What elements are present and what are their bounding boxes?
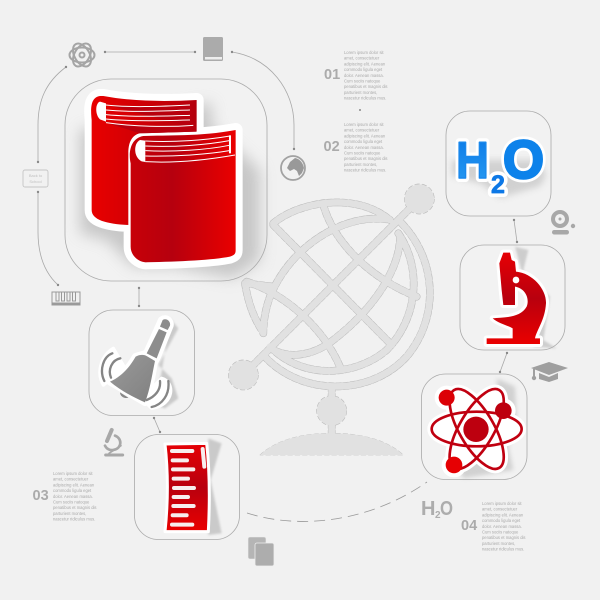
text block 04: adipiscing elit. Aenean	[482, 512, 524, 517]
icon: H2O sticker: H	[456, 132, 489, 190]
text block 01: Cum sociis natoque	[344, 78, 381, 84]
text block 02: dolor. Aenean massa.	[344, 145, 384, 150]
globe illustration	[228, 184, 434, 455]
text block 01: adipiscing elit. Aenean	[344, 61, 386, 66]
icon: back to school sign: School	[29, 179, 42, 184]
panel: atom	[422, 374, 527, 480]
icon: books small	[248, 537, 274, 566]
text block 03: Cum sociis natoque	[53, 500, 90, 504]
text block 03: dolor. Aenean massa.	[53, 494, 93, 499]
panel: bell	[89, 310, 194, 416]
icon: H2O sticker	[456, 130, 544, 199]
panel: scroll	[134, 434, 240, 540]
text block 03: commodo ligula eget	[53, 488, 92, 493]
icon: piano keys	[52, 292, 80, 305]
number 01: 01	[324, 67, 340, 83]
label: H2O grey: 2	[435, 510, 441, 521]
text block 02: Lorem ipsum dolor sit	[344, 122, 384, 127]
icon: book small	[203, 37, 223, 61]
icon: H2O sticker: 2	[491, 171, 505, 199]
text block 04: penatibus et magnis dis	[482, 535, 526, 540]
icon: atom small	[69, 40, 95, 70]
text block 03: amet, consectetuer	[53, 477, 89, 482]
text block 01: amet, consectetuer	[344, 56, 380, 61]
icon: H2O sticker: H	[456, 132, 489, 190]
number 04: 04	[461, 518, 477, 534]
text block 01: parturient montes,	[344, 90, 377, 95]
number 03: 03	[32, 488, 49, 504]
icon: H2O sticker: 2	[491, 171, 505, 199]
text block 02: adipiscing elit. Aenean	[344, 133, 386, 138]
label: H2O grey: H	[421, 498, 435, 520]
text block 01: Lorem ipsum dolor sit	[344, 50, 384, 55]
icon: bell small	[552, 212, 575, 234]
label: H2O grey: O	[440, 498, 453, 520]
text block 04: Cum sociis natoque	[482, 530, 519, 534]
connector lines and arrows	[37, 51, 518, 521]
text block 01: commodo ligula eget	[344, 67, 383, 72]
text block 04: parturient montes,	[482, 541, 515, 546]
text block 01: nascetur ridiculus mus.	[344, 96, 386, 101]
number 02: 02	[324, 139, 340, 155]
label: H2O grey	[421, 498, 453, 521]
text block 04: amet, consectetuer	[482, 507, 518, 512]
icon: H2O sticker: O	[503, 130, 544, 190]
text block 02: parturient montes,	[344, 162, 377, 167]
panel: H2O	[446, 111, 551, 216]
icon: atom sticker	[432, 378, 522, 478]
text block 02: nascetur ridiculus mus.	[344, 168, 386, 173]
text block 02: amet, consectetuer	[344, 128, 380, 133]
icon: microscope small	[105, 430, 123, 455]
text block 04: dolor. Aenean massa.	[482, 524, 522, 529]
icon: graduation cap	[531, 362, 568, 382]
icon: scroll sticker	[165, 438, 222, 535]
icon: microscope sticker	[487, 247, 557, 348]
icon: bell sticker	[100, 318, 178, 408]
text block 01: penatibus et magnis dis	[344, 84, 388, 89]
text block 04: Lorem ipsum dolor sit	[482, 501, 522, 506]
text block 03: nascetur ridiculus mus.	[53, 517, 95, 522]
text block 03: adipiscing elit. Aenean	[53, 482, 95, 487]
text block 02: Cum sociis natoque	[344, 150, 381, 156]
text block 01: dolor. Aenean massa.	[344, 73, 384, 78]
icon: back to school sign	[23, 170, 48, 187]
icon: globe small	[281, 156, 305, 180]
icon: red books sticker	[80, 96, 260, 278]
text block 04: nascetur ridiculus mus.	[482, 547, 524, 552]
text block 03: Lorem ipsum dolor sit	[53, 471, 93, 476]
text block 02: penatibus et magnis dis	[344, 156, 388, 161]
text block 03: penatibus et magnis dis	[53, 505, 97, 510]
panel: microscope	[460, 245, 565, 350]
panel: books	[65, 79, 267, 281]
text block 02: commodo ligula eget	[344, 139, 383, 144]
icon: H2O sticker: O	[503, 130, 544, 190]
text block 04: commodo ligula eget	[482, 518, 521, 523]
icon: back to school sign: Back to	[29, 173, 43, 178]
text block 03: parturient montes,	[53, 511, 86, 516]
